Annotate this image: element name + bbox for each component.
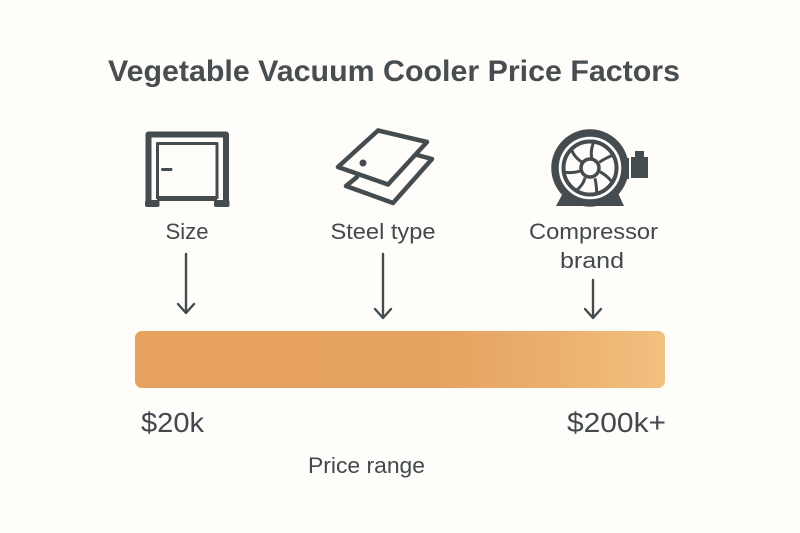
label: price range: Price range [308, 453, 425, 478]
label: compressor brand [529, 219, 658, 273]
label: steel type: Steel type [330, 219, 436, 244]
label: low price: $20k [141, 407, 205, 438]
arrow: size [178, 254, 194, 313]
arrow: compressor brand [585, 280, 601, 318]
label: compressor brand: Compressor [529, 219, 658, 244]
title: Vegetable Vacuum Cooler Price Factors [108, 55, 680, 88]
price bar [135, 331, 665, 388]
icon: size cabinet [145, 134, 230, 207]
label: compressor brand: brand [560, 248, 624, 273]
arrow: steel type [375, 254, 391, 318]
icon: steel sheets [338, 130, 432, 203]
icon: compressor fan [555, 133, 648, 206]
label: size: Size [166, 219, 208, 244]
label: high price: $200k+ [567, 407, 666, 438]
